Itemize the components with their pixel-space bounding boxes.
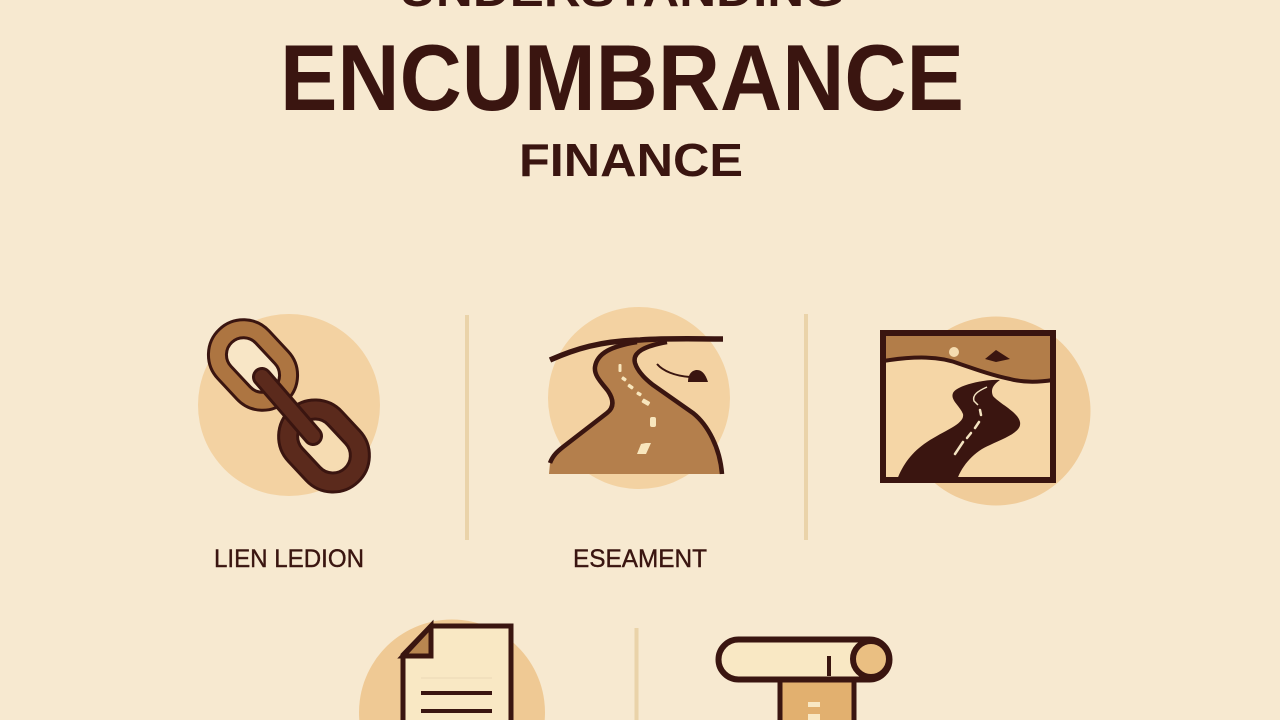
panel: document <box>359 620 545 720</box>
label: eseament: ESEAMENT <box>573 545 707 573</box>
icon: document page <box>359 620 545 720</box>
title line: encumbrance: ENCUMBRANCE <box>280 25 964 130</box>
panel: deed scroll <box>718 640 890 720</box>
title <box>280 0 964 186</box>
panel: right of way map <box>883 316 1090 506</box>
icon: chain link <box>198 314 380 496</box>
icon: winding road <box>548 307 730 489</box>
icon: paper scroll <box>718 640 890 720</box>
title line: finance: FINANCE <box>519 134 743 186</box>
panel: easement <box>548 307 730 573</box>
label: lien ledion: LIEN LEDION <box>214 545 364 573</box>
icon: framed road landscape <box>883 316 1090 506</box>
panel: lien <box>198 314 380 573</box>
